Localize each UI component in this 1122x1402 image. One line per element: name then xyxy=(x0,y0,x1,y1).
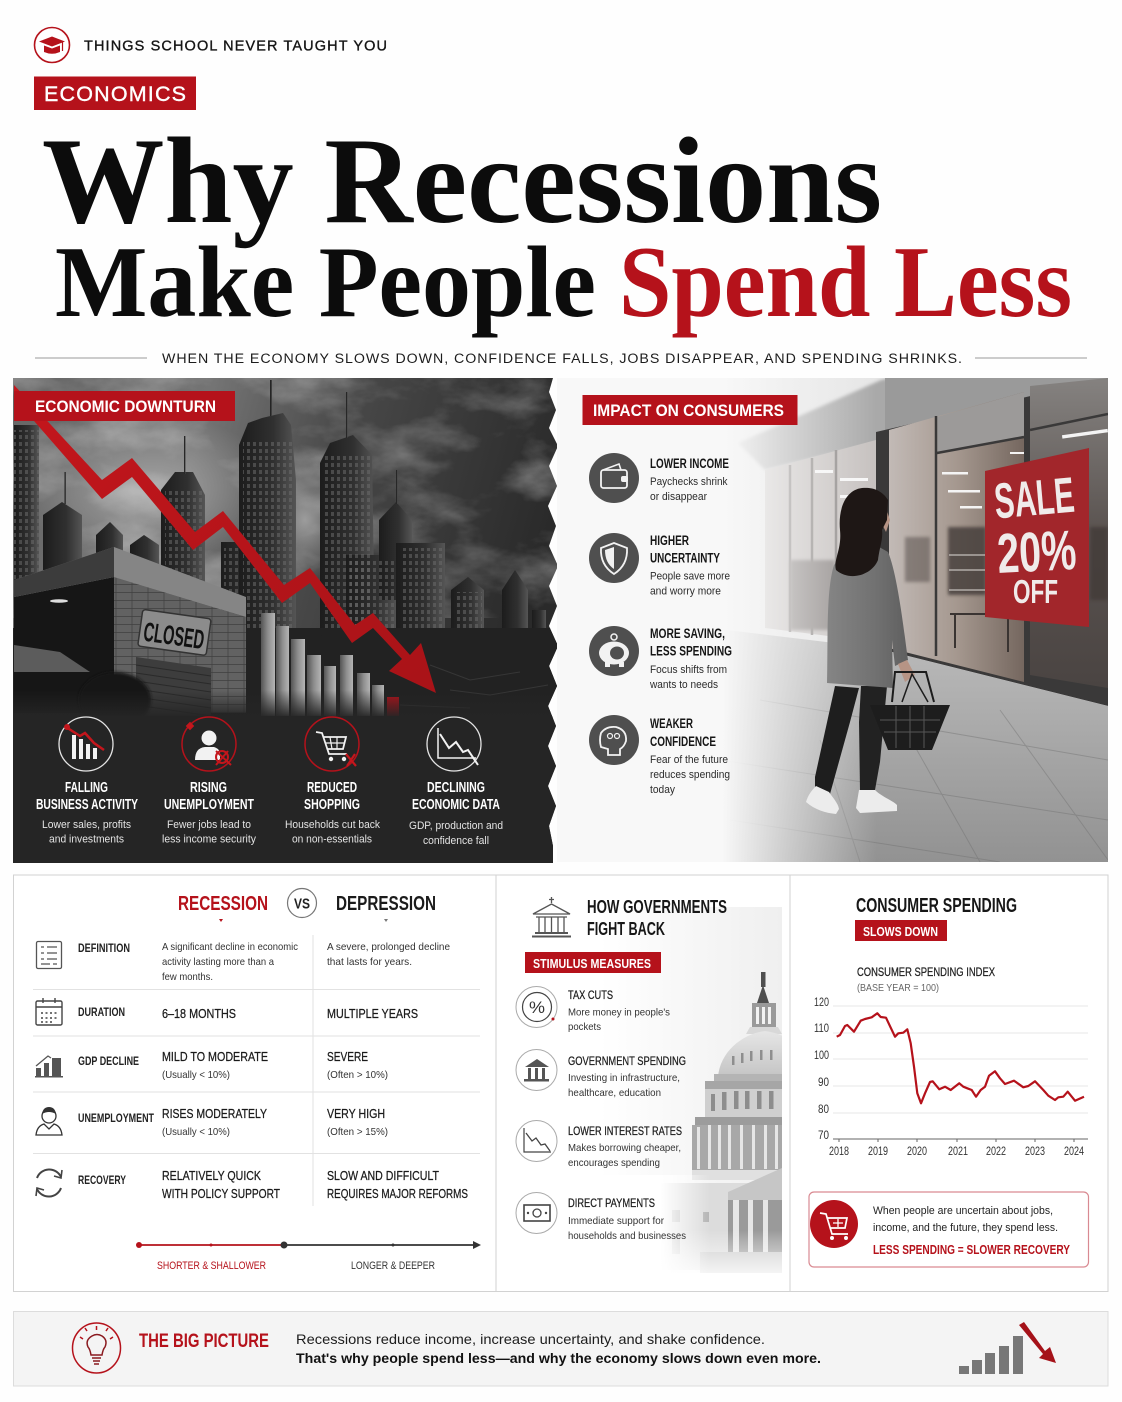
item: falling business activity: and investments xyxy=(49,834,124,846)
sale sign: 20% xyxy=(996,518,1078,585)
panel: how governments fight back xyxy=(516,897,812,1273)
item: reduced shopping: SHOPPING xyxy=(304,797,360,813)
callout: less spending, slower recovery: When people are uncertain about jobs, xyxy=(873,1205,1053,1217)
row: definition: A significant decline in economic xyxy=(162,941,298,953)
panel: the big picture: THE BIG PICTURE xyxy=(139,1331,269,1352)
tag: slows down xyxy=(855,920,947,941)
panel: impact on consumers xyxy=(557,378,1108,862)
heading: how governments fight back: HOW GOVERNMENTS xyxy=(587,897,727,917)
item: tax cuts: TAX CUTS xyxy=(568,988,613,1002)
icon: falling line chart xyxy=(516,1120,557,1162)
item: more saving, less spending: Focus shifts from xyxy=(650,664,727,676)
item: weaker confidence: today xyxy=(650,784,675,796)
item: lower income xyxy=(589,453,729,503)
white fade xyxy=(557,378,865,862)
row: recovery: REQUIRES MAJOR REFORMS xyxy=(327,1187,468,1201)
item: lower interest rates: LOWER INTEREST RATES xyxy=(568,1124,682,1138)
line chart: consumer spending index: 2022 xyxy=(986,1146,1006,1158)
sign: closed xyxy=(138,609,211,656)
line chart: consumer spending index: 2019 xyxy=(868,1146,888,1158)
callout: less spending, slower recovery xyxy=(809,1192,1088,1267)
item: weaker confidence: CONFIDENCE xyxy=(650,734,716,749)
sale sign: OFF xyxy=(1013,573,1058,610)
panel: recession vs depression xyxy=(33,888,481,1272)
item: direct payments: DIRECT PAYMENTS xyxy=(568,1196,655,1210)
item: tax cuts xyxy=(516,986,670,1033)
item: government spending: healthcare, education xyxy=(568,1087,661,1099)
row: unemployment: RISES MODERATELY xyxy=(162,1107,268,1121)
title: Why Recessions xyxy=(42,112,882,249)
icon: percent xyxy=(516,986,557,1028)
line chart: consumer spending index xyxy=(814,997,1088,1158)
icon: declining line chart xyxy=(427,717,481,771)
item: reduced shopping xyxy=(285,717,380,846)
item: direct payments: Immediate support for xyxy=(568,1215,664,1227)
row: duration: MULTIPLE YEARS xyxy=(327,1007,418,1021)
item: direct payments: households and businesses xyxy=(568,1230,686,1242)
line chart: consumer spending index: 2018 xyxy=(829,1146,849,1158)
row: gdp decline xyxy=(35,1050,388,1081)
title: Spend Less xyxy=(619,226,1072,339)
icon: shield xyxy=(589,533,639,583)
item: government spending: GOVERNMENT SPENDING xyxy=(568,1054,686,1068)
tag: stimulus measures xyxy=(525,952,661,973)
line chart: consumer spending index: 2021 xyxy=(948,1146,968,1158)
line chart: consumer spending index: 2023 xyxy=(1025,1146,1045,1158)
panel: consumer spending xyxy=(809,895,1088,1267)
row: definition: A severe, prolonged decline xyxy=(327,941,450,953)
divider left xyxy=(495,875,497,1291)
comparison headings xyxy=(178,888,436,922)
illustration: closed storefront xyxy=(14,547,246,728)
category tag: ECONOMICS xyxy=(44,82,186,106)
item: lower interest rates: encourages spending xyxy=(568,1157,660,1169)
icon: bars with falling arrow xyxy=(959,1322,1056,1374)
icon: piggy bank xyxy=(589,626,639,676)
heading tag: impact on consumers: IMPACT ON CONSUMERS xyxy=(593,401,784,420)
item: rising unemployment: Fewer jobs lead to xyxy=(167,819,251,831)
item: tax cuts: pockets xyxy=(568,1021,601,1033)
item: government spending xyxy=(516,1050,686,1099)
item: higher uncertainty: HIGHER xyxy=(650,533,689,548)
item: direct payments xyxy=(516,1192,686,1242)
item: rising unemployment xyxy=(162,717,256,846)
row: definition: few months. xyxy=(162,971,213,983)
series header xyxy=(34,28,387,62)
item: higher uncertainty: UNCERTAINTY xyxy=(650,550,720,566)
line chart: consumer spending index: 90 xyxy=(818,1077,829,1089)
icon: person xyxy=(36,1107,62,1135)
heading: how governments fight back: FIGHT BACK xyxy=(587,919,665,939)
item: more saving, less spending xyxy=(589,626,732,691)
item: declining economic data: confidence fall xyxy=(423,835,489,847)
heading: consumer spending: CONSUMER SPENDING xyxy=(856,895,1017,917)
item: declining economic data: GDP, production and xyxy=(409,820,503,832)
heading tag: economic downturn: ECONOMIC DOWNTURN xyxy=(35,397,216,416)
row: gdp decline: (Usually < 10%) xyxy=(162,1069,230,1081)
comparison headings: DEPRESSION xyxy=(336,893,436,915)
item: lower income: or disappear xyxy=(650,491,707,503)
icon: shopping cart xyxy=(305,717,359,771)
bottom panels frame xyxy=(14,875,1108,1292)
item: weaker confidence: WEAKER xyxy=(650,716,693,731)
illustration: falling bar chart xyxy=(261,613,399,718)
icon: person with cross xyxy=(182,717,236,771)
row: unemployment: (Usually < 10%) xyxy=(162,1126,230,1138)
sign: closed: CLOSED xyxy=(142,617,206,655)
icon: bank xyxy=(516,1050,557,1090)
chart title: (BASE YEAR = 100) xyxy=(857,982,939,994)
item: reduced shopping: REDUCED xyxy=(307,780,357,796)
item: falling business activity: FALLING xyxy=(65,780,108,796)
row: unemployment: (Often > 15%) xyxy=(327,1126,388,1138)
item: more saving, less spending: MORE SAVING, xyxy=(650,626,725,641)
item: rising unemployment: less income security xyxy=(162,834,256,846)
line chart: consumer spending index: 80 xyxy=(818,1104,829,1116)
icon: banknote xyxy=(516,1192,557,1234)
item: government spending: Investing in infrastructure, xyxy=(568,1072,680,1084)
icon: wallet xyxy=(589,453,639,503)
row: recovery: RECOVERY xyxy=(78,1173,126,1187)
panel: the big picture: That's why people spend less—and why the economy slows down even more. xyxy=(296,1350,821,1366)
item: higher uncertainty: People save more xyxy=(650,570,730,582)
row: duration: DURATION xyxy=(78,1005,125,1019)
row: unemployment: VERY HIGH xyxy=(327,1107,385,1121)
callout: less spending, slower recovery: income, and the future, they spend less. xyxy=(873,1222,1058,1234)
item: declining economic data: DECLINING xyxy=(427,780,485,796)
severity scale xyxy=(136,1241,481,1272)
item: weaker confidence xyxy=(589,715,730,796)
divider right xyxy=(789,875,791,1291)
item: lower income: LOWER INCOME xyxy=(650,456,729,471)
item: more saving, less spending: wants to needs xyxy=(649,679,718,691)
photo: storefront xyxy=(732,378,1108,862)
line chart: consumer spending index: 2024 xyxy=(1064,1146,1084,1158)
sale sign xyxy=(985,448,1089,627)
row: gdp decline: (Often > 10%) xyxy=(327,1069,388,1081)
icon: cart in red circle xyxy=(810,1200,858,1248)
item: lower interest rates: Makes borrowing cheaper, xyxy=(568,1142,681,1154)
panel: economic downturn xyxy=(13,378,558,863)
line chart: consumer spending index: 2020 xyxy=(907,1146,927,1158)
icon: document list xyxy=(36,942,62,968)
icon: percent: % xyxy=(529,998,545,1017)
severity scale: SHORTER & SHALLOWER xyxy=(157,1260,266,1272)
icon: cycle arrows xyxy=(36,1169,62,1197)
line chart: consumer spending index: 100 xyxy=(814,1050,829,1062)
item: falling business activity: Lower sales, profits xyxy=(42,819,131,831)
item: lower interest rates xyxy=(516,1120,682,1169)
item: weaker confidence: Fear of the future xyxy=(650,754,728,766)
category tag xyxy=(34,76,196,110)
chart title: CONSUMER SPENDING INDEX xyxy=(857,965,995,979)
row: recovery: SLOW AND DIFFICULT xyxy=(327,1169,439,1183)
tag: stimulus measures: STIMULUS MEASURES xyxy=(533,956,651,971)
row: unemployment xyxy=(36,1107,388,1138)
icon: graduation cap xyxy=(34,28,70,62)
row: duration: 6–18 MONTHS xyxy=(162,1007,236,1021)
icon: light bulb xyxy=(72,1323,120,1373)
row: definition: that lasts for years. xyxy=(327,956,412,968)
callout: less spending, slower recovery: LESS SPENDING = SLOWER RECOVERY xyxy=(873,1242,1070,1257)
line chart: consumer spending index: 110 xyxy=(814,1023,829,1035)
series name: THINGS SCHOOL NEVER TAUGHT YOU xyxy=(84,38,387,54)
row: gdp decline: MILD TO MODERATE xyxy=(162,1050,268,1064)
icon: government building xyxy=(532,897,571,936)
dark footer band xyxy=(13,690,558,863)
item: reduced shopping: on non-essentials xyxy=(292,834,372,846)
row: gdp decline: GDP DECLINE xyxy=(78,1054,139,1068)
comparison headings: VS xyxy=(294,896,310,912)
tag: slows down: SLOWS DOWN xyxy=(863,924,938,939)
icon: calendar xyxy=(36,998,62,1025)
icon: rising bars xyxy=(35,1056,63,1078)
icon: falling bars xyxy=(59,717,113,771)
item: more saving, less spending: LESS SPENDING xyxy=(650,644,732,658)
comparison headings: RECESSION xyxy=(178,893,268,915)
arrow: falling economy xyxy=(14,385,436,693)
row: unemployment: UNEMPLOYMENT xyxy=(78,1111,154,1125)
item: higher uncertainty: and worry more xyxy=(650,586,721,598)
item: falling business activity: BUSINESS ACTIVITY xyxy=(36,797,138,813)
item: tax cuts: More money in people's xyxy=(568,1006,670,1018)
chart title xyxy=(857,965,995,994)
row: recovery: RELATIVELY QUICK xyxy=(162,1169,262,1183)
row: recovery: WITH POLICY SUPPORT xyxy=(162,1187,280,1201)
item: weaker confidence: reduces spending xyxy=(650,769,730,781)
item: lower income: Paychecks shrink xyxy=(650,476,728,488)
title xyxy=(42,112,1072,339)
subtitle: WHEN THE ECONOMY SLOWS DOWN, CONFIDENCE FALLS, JOBS DISAPPEAR, AND SPENDING SHRINKS. xyxy=(162,351,962,367)
item: reduced shopping: Households cut back xyxy=(285,819,380,831)
item: declining economic data: ECONOMIC DATA xyxy=(412,797,500,813)
icon: head with brain xyxy=(589,715,639,765)
illustration: woman with basket xyxy=(806,488,950,814)
item: declining economic data xyxy=(409,717,503,847)
panel: the big picture: Recessions reduce income, increase uncertainty, and shake confidence. xyxy=(296,1331,765,1347)
row: definition xyxy=(36,941,450,983)
line chart: consumer spending index: 120 xyxy=(814,997,829,1009)
item: rising unemployment: RISING xyxy=(190,780,227,796)
item: higher uncertainty xyxy=(589,533,730,598)
item: falling business activity xyxy=(36,717,138,846)
row: definition: activity lasting more than a xyxy=(162,956,274,968)
heading: how governments fight back xyxy=(532,897,727,939)
heading tag: economic downturn xyxy=(14,391,235,421)
row: gdp decline: SEVERE xyxy=(327,1050,368,1064)
panel: the big picture xyxy=(14,1312,1108,1386)
item: rising unemployment: UNEMPLOYMENT xyxy=(164,797,254,813)
heading tag: impact on consumers xyxy=(582,395,798,425)
row: definition: DEFINITION xyxy=(78,941,130,955)
row: duration xyxy=(36,998,418,1025)
illustration: stormy city skyline xyxy=(13,378,558,863)
row: recovery xyxy=(36,1169,468,1201)
title: Make People xyxy=(55,226,596,339)
line chart: consumer spending index: 70 xyxy=(818,1130,829,1142)
severity scale: LONGER & DEEPER xyxy=(351,1260,435,1272)
photo: capitol dome xyxy=(672,907,782,1273)
